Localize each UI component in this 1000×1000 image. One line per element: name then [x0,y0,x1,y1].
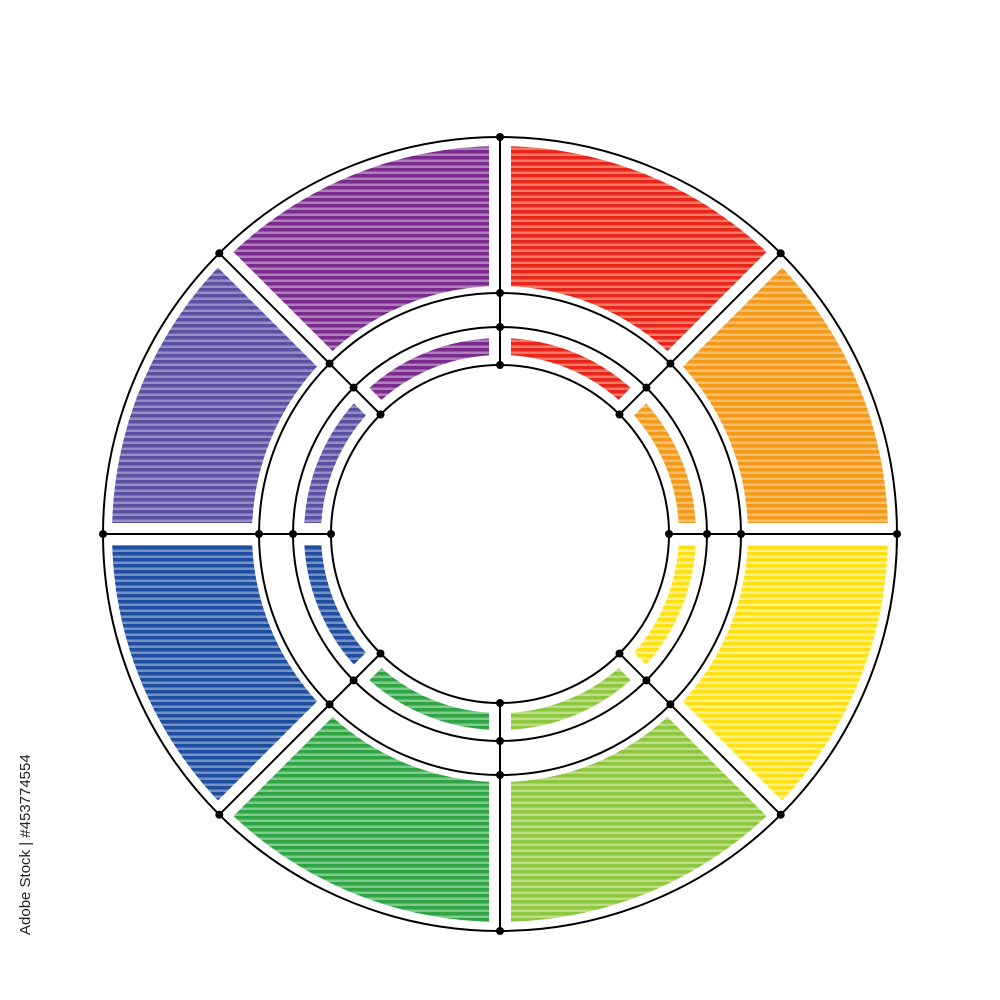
segment: indigo outer [112,260,325,534]
segment: orange inner [627,395,696,534]
segment: blue outer [112,534,325,808]
intersection dots [99,133,901,935]
outer band segments [112,146,888,922]
radial separators [103,137,897,931]
inner band segments [304,338,696,730]
segment: purple outer [226,146,500,359]
segment: indigo inner [304,395,373,534]
side credit text: Adobe Stock | #453774554 [17,754,34,935]
segment: purple inner [361,338,500,407]
segment: red inner [500,338,639,407]
segment: green outer [226,709,500,922]
segment: orange outer [675,260,888,534]
segment: yellow-green outer [500,709,774,922]
segment: yellow-green inner [500,661,639,730]
segment: blue inner [304,534,373,673]
segment: red outer [500,146,774,359]
segment: yellow outer [675,534,888,808]
ring outlines [103,137,897,931]
segment: green inner [361,661,500,730]
segment: yellow inner [627,534,696,673]
